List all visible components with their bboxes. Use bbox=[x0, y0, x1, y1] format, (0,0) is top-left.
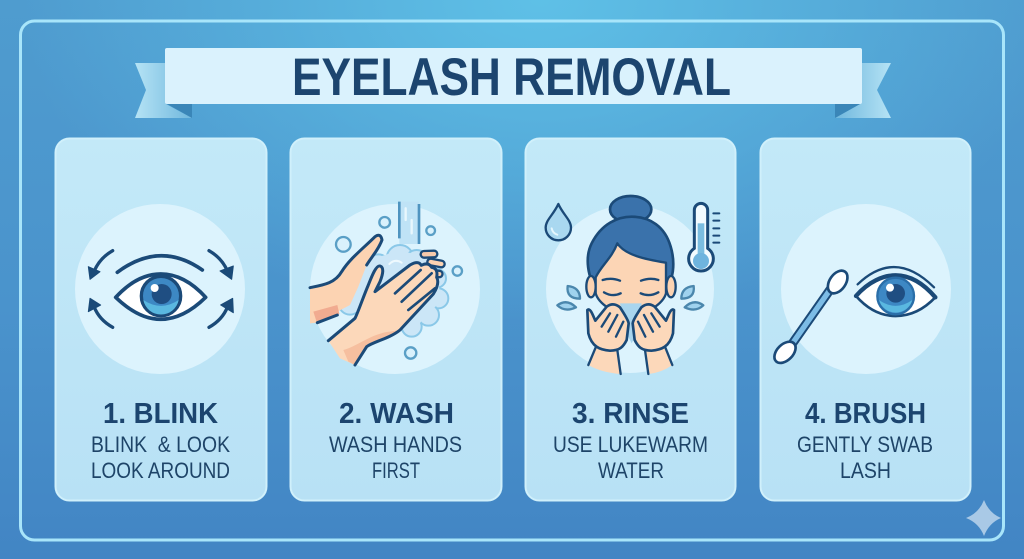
icon circle bbox=[781, 204, 951, 374]
icon: sparkle bbox=[966, 500, 1001, 536]
heading: 1. BLINK bbox=[103, 398, 218, 430]
description bbox=[91, 432, 230, 483]
icon circle bbox=[546, 205, 714, 373]
description bbox=[797, 432, 933, 483]
title: EYELASH REMOVAL bbox=[292, 48, 731, 107]
description: USE LUKEWARM bbox=[553, 432, 708, 457]
icon: woman rinsing face bbox=[546, 196, 719, 374]
ribbon fold: right bbox=[835, 104, 860, 118]
panel: 2 wash bbox=[290, 138, 502, 500]
description: BLINK & LOOK bbox=[91, 432, 230, 457]
description: LASH bbox=[840, 458, 891, 483]
ribbon fold: left bbox=[167, 104, 192, 118]
ribbon band bbox=[165, 48, 862, 104]
panel: 1 blink bbox=[56, 138, 266, 500]
icon: cotton swab and eye bbox=[770, 267, 935, 367]
heading: 2. WASH bbox=[339, 398, 454, 430]
icon: eye with look-around arrows bbox=[88, 251, 233, 327]
description: FIRST bbox=[372, 458, 420, 483]
panel: 4 brush bbox=[760, 138, 970, 500]
description bbox=[329, 432, 462, 483]
icon circle bbox=[75, 204, 245, 374]
title banner bbox=[135, 48, 891, 118]
heading: 4. BRUSH bbox=[805, 398, 926, 430]
panel: 3 rinse bbox=[526, 138, 736, 500]
description: WATER bbox=[598, 458, 664, 483]
icon: hands washing with foam bbox=[310, 202, 462, 365]
card bbox=[290, 138, 502, 500]
ribbon tail: right bbox=[835, 63, 891, 118]
description: WASH HANDS bbox=[329, 432, 462, 457]
description bbox=[553, 432, 708, 483]
description: GENTLY SWAB bbox=[797, 432, 933, 457]
heading: 3. RINSE bbox=[572, 398, 689, 430]
icon circle bbox=[310, 204, 480, 374]
description: LOOK AROUND bbox=[91, 458, 230, 483]
card bbox=[526, 138, 736, 500]
card bbox=[760, 138, 970, 500]
card bbox=[56, 138, 266, 500]
ribbon tail: left bbox=[135, 63, 192, 118]
